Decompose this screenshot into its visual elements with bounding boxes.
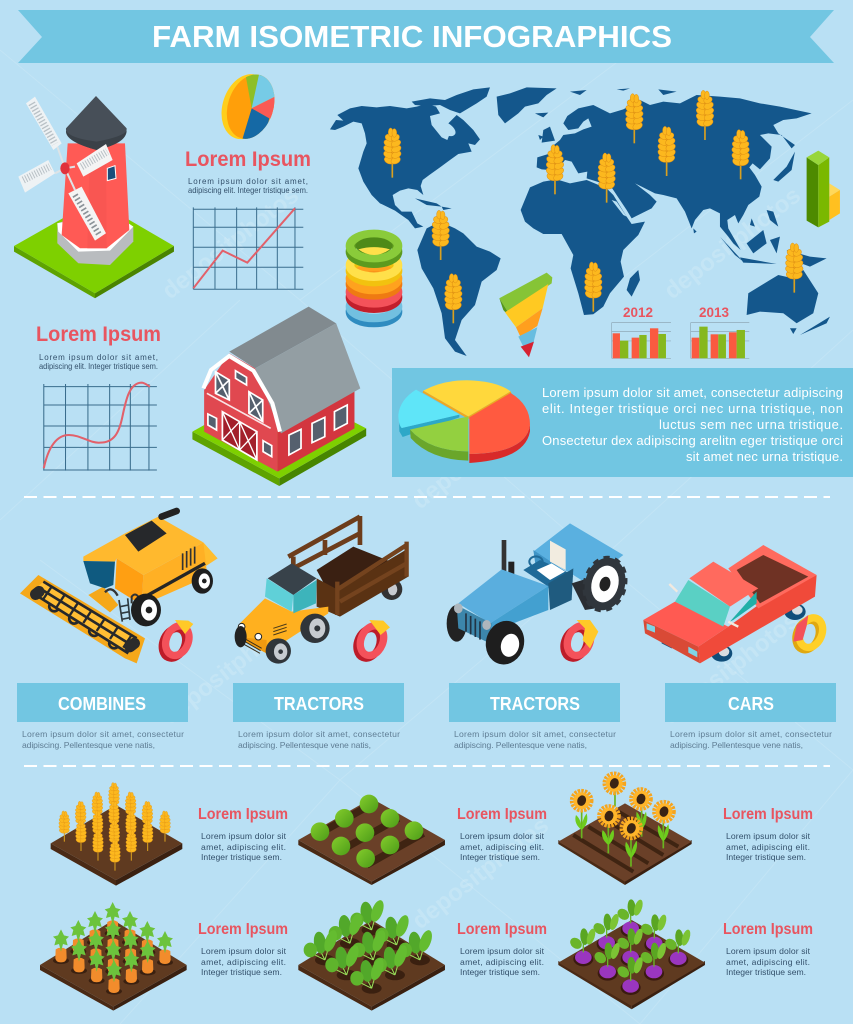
title banner (18, 10, 834, 63)
crop text: cabbage: Lorem Ipsum (457, 806, 547, 823)
icon: truck (235, 516, 408, 664)
crop text: carrot: Lorem Ipsum (198, 921, 288, 938)
crop text: greens: Integer tristique sem. (460, 967, 540, 977)
chart: bars 2012 (612, 323, 671, 358)
icon: sunflower field (558, 774, 692, 885)
crop text: beet: amet, adipiscing elit. (726, 957, 810, 967)
crop text: sunflower: Lorem ipsum dolor sit (726, 831, 811, 841)
crop text: greens: Lorem ipsum dolor sit (460, 946, 545, 956)
panel text: Onsectetur dex adipiscing arelitn eger tristique orci (542, 433, 843, 448)
crop text: beet (723, 921, 813, 977)
crop text: sunflower: amet, adipiscing elit. (726, 842, 810, 852)
crop text: sunflower: Lorem Ipsum (723, 806, 813, 823)
chart: bars 2013 (691, 323, 749, 358)
crop text: cabbage: Integer tristique sem. (460, 852, 540, 862)
heading: lorem ipsum 1: Lorem Ipsum (185, 148, 311, 171)
text block 1 (188, 177, 308, 195)
text: depositphotos (407, 812, 554, 935)
crop text: wheat: Integer tristique sem. (201, 852, 282, 862)
description: cars: adipiscing. Pellentesque vene natis, (670, 740, 803, 750)
panel: tractors 1 (233, 683, 404, 750)
icon: cabbage field (298, 795, 445, 885)
description: combines: adipiscing. Pellentesque vene natis, (22, 740, 155, 750)
chart: curve line (44, 383, 157, 471)
crop text: greens: Lorem Ipsum (457, 921, 547, 938)
description: combines: Lorem ipsum dolor sit amet, consectetur (22, 729, 184, 739)
description: tractors 2: Lorem ipsum dolor sit amet, consectetur (454, 729, 616, 739)
description: combines (22, 729, 184, 750)
crop text: wheat (198, 806, 288, 862)
panel text (542, 385, 843, 464)
panel text: Lorem ipsum dolor sit amet, consectetur adipiscing (542, 385, 843, 400)
crop text: cabbage (457, 806, 547, 862)
chart: ring tractors 2 (560, 620, 598, 662)
description: cars (670, 729, 832, 750)
label: 2013: 2013 (699, 304, 729, 320)
icon: beet field (558, 899, 705, 1009)
text: depositphotos (157, 607, 304, 730)
crop text: greens (457, 921, 547, 977)
panel: cars (665, 683, 836, 750)
crop text: carrot: amet, adipiscing elit. (201, 957, 286, 967)
chart: big pie (398, 380, 530, 463)
description: tractors 2: adipiscing. Pellentesque vene natis, (454, 740, 587, 750)
crop text: wheat: amet, adipiscing elit. (201, 842, 286, 852)
description: tractors 1 (238, 729, 400, 750)
crop text: sunflower (723, 806, 813, 862)
icon: blue tractor (447, 523, 631, 669)
chart: ring cars (792, 614, 827, 653)
text: depositphotos (407, 392, 554, 515)
icons: wheat markers (382, 90, 804, 323)
crop text: carrot: Lorem ipsum dolor sit (201, 946, 287, 956)
text: depositphotos (657, 607, 804, 730)
panel: tractors 2: TRACTORS (490, 693, 580, 714)
panel text: elit. Integer tristique orci nec urna tristique, non (542, 401, 843, 416)
panel: combines: COMBINES (58, 693, 146, 714)
crop text: beet: Lorem Ipsum (723, 921, 813, 938)
icon: combine harvester (20, 511, 218, 663)
crop text: carrot (198, 921, 288, 977)
world map (330, 87, 830, 356)
text: depositphotos (157, 182, 304, 305)
panel: tractors 2 (449, 683, 620, 750)
chart: ring tractors 1 (353, 620, 390, 662)
chart: ring combines (158, 620, 193, 662)
label: 2012: 2012 (623, 304, 653, 320)
panel: tractors 1: TRACTORS (274, 693, 364, 714)
description: tractors 2 (454, 729, 616, 750)
text block 1: Lorem ipsum dolor sit amet, (188, 177, 308, 186)
chart: stacked rings (350, 234, 398, 323)
description: tractors 1: Lorem ipsum dolor sit amet, consectetur (238, 729, 400, 739)
crop text: greens: amet, adipiscing elit. (460, 957, 544, 967)
icon: wheat field (51, 783, 182, 886)
chart: pie top (222, 74, 274, 140)
text block 2: Lorem ipsum dolor sit amet, (39, 353, 158, 362)
crop text: carrot: Integer tristique sem. (201, 967, 282, 977)
crop text: cabbage: Lorem ipsum dolor sit (460, 831, 545, 841)
icon: leafy greens field (298, 899, 445, 1011)
text block 2 (39, 353, 158, 371)
description: tractors 1: adipiscing. Pellentesque vene natis, (238, 740, 371, 750)
icon: pickup truck (643, 545, 817, 663)
crop text: cabbage: amet, adipiscing elit. (460, 842, 544, 852)
crop text: wheat: Lorem Ipsum (198, 806, 288, 823)
panel: big pie text (392, 368, 853, 477)
panel text: luctus sem nec urna tristique. (659, 417, 843, 432)
crop text: beet: Integer tristique sem. (726, 967, 806, 977)
crop text: wheat: Lorem ipsum dolor sit (201, 831, 287, 841)
chart: funnel (499, 273, 552, 357)
icon: carrot field (40, 902, 187, 1011)
description: cars: Lorem ipsum dolor sit amet, consectetur (670, 729, 832, 739)
crop text: sunflower: Integer tristique sem. (726, 852, 806, 862)
text block 1: adipiscing elit. Integer tristique sem. (188, 186, 308, 195)
crop text: beet: Lorem ipsum dolor sit (726, 946, 811, 956)
panel: cars: CARS (728, 693, 774, 714)
panel text: sit amet nec urna tristique. (686, 449, 843, 464)
text: depositphotos (659, 182, 806, 305)
icon: barn (192, 307, 366, 486)
title: FARM ISOMETRIC INFOGRAPHICS (152, 19, 672, 54)
icon: windmill (14, 96, 174, 298)
chart: 3d bars (807, 151, 840, 227)
heading: lorem ipsum 2: Lorem Ipsum (36, 323, 161, 346)
panel: combines (17, 683, 188, 750)
text block 2: adipiscing elit. Integer tristique sem. (39, 362, 158, 371)
chart: rising line (193, 207, 303, 289)
